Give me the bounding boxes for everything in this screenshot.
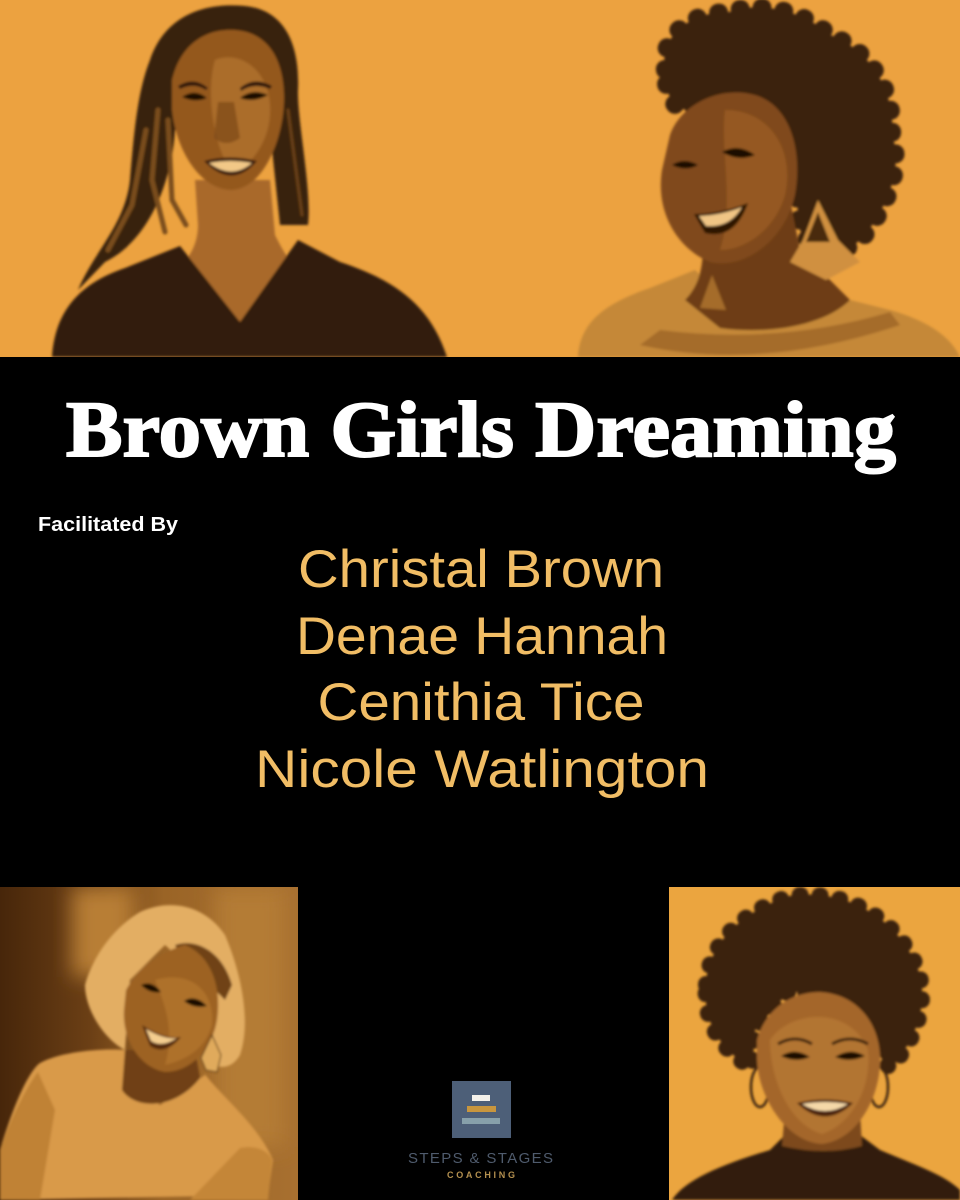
logo subline: COACHING	[447, 1170, 515, 1180]
earring	[201, 1035, 221, 1072]
smile	[142, 1025, 181, 1049]
face	[172, 30, 284, 190]
smile	[797, 1100, 853, 1116]
name: Denae Hannah: Denae Hannah	[296, 607, 668, 666]
earring	[790, 200, 860, 280]
dress	[0, 1050, 273, 1200]
facilitated by label: Facilitated By	[38, 514, 179, 536]
neck	[780, 1120, 864, 1153]
photo: top left portrait	[0, 0, 480, 357]
locs	[78, 5, 309, 290]
name: Christal Brown: Christal Brown	[298, 540, 664, 599]
neck	[122, 1050, 200, 1104]
nose and smile	[214, 102, 240, 143]
name: Nicole Watlington: Nicole Watlington	[255, 740, 709, 799]
logo icon: stacked steps	[452, 1081, 511, 1138]
logo wordmark: STEPS & STAGES	[408, 1150, 553, 1167]
neck and chest	[685, 200, 850, 330]
facilitator names	[255, 540, 709, 799]
curly hair	[664, 7, 896, 251]
sweater	[578, 270, 960, 357]
hair	[85, 905, 245, 1067]
face	[661, 92, 797, 263]
face	[124, 945, 218, 1072]
photo: bottom right portrait	[669, 887, 960, 1200]
title: Brown Girls Dreaming	[66, 387, 896, 474]
photo: top right portrait	[480, 0, 960, 357]
eyes	[182, 92, 268, 100]
photo: bottom left portrait	[0, 887, 298, 1200]
name: Cenithia Tice: Cenithia Tice	[318, 673, 644, 732]
smile	[694, 203, 748, 234]
neck and chest	[188, 178, 287, 322]
eyes	[141, 984, 207, 1007]
top	[672, 1135, 960, 1200]
eyes	[672, 148, 755, 168]
top	[52, 240, 447, 357]
eyes	[781, 1052, 865, 1060]
face	[757, 992, 880, 1144]
logo: Steps & Stages Coaching	[408, 1081, 553, 1180]
curly hair	[706, 895, 922, 1068]
earrings	[751, 1067, 769, 1107]
